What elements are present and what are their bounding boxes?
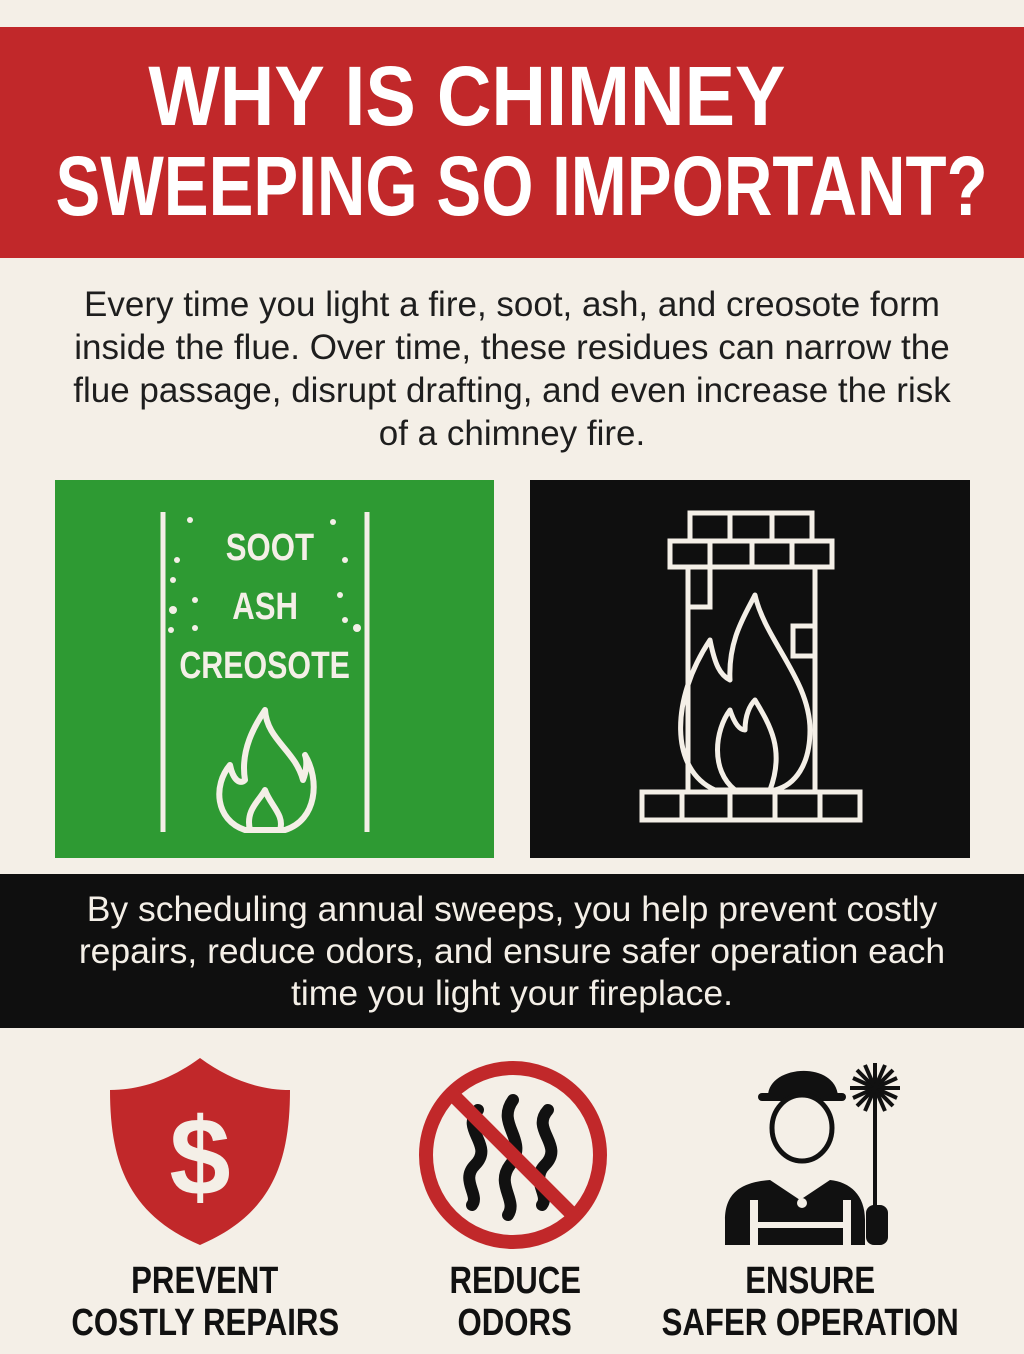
icon: no odors [419, 1061, 607, 1249]
intro text: Every time you light a fire, soot, ash, and creosote form [84, 285, 940, 324]
labels: soot ash creosote [180, 527, 350, 687]
label [661, 1260, 959, 1344]
icon: small flame [219, 710, 314, 830]
panel: chimney fire (black) [530, 480, 970, 858]
title [56, 49, 988, 233]
icon: shield with dollar: $ [169, 1096, 231, 1219]
title banner [0, 27, 1024, 258]
label: PREVENT [131, 1260, 279, 1302]
label: SAFER OPERATION [661, 1302, 959, 1344]
intro text: flue passage, disrupt drafting, and even increase the risk [73, 371, 951, 410]
icon: shield with dollar [110, 1058, 290, 1245]
benefit: reduce odors [419, 1061, 607, 1344]
black band text: By scheduling annual sweeps, you help prevent costly [87, 889, 937, 929]
title: WHY IS CHIMNEY [148, 49, 786, 143]
black band text: repairs, reduce odors, and ensure safer operation each [79, 931, 945, 971]
intro text: of a chimney fire. [379, 414, 645, 453]
labels: soot ash creosote: SOOT [226, 527, 314, 569]
labels: soot ash creosote: CREOSOTE [180, 645, 350, 687]
label: COSTLY REPAIRS [71, 1302, 339, 1344]
intro text: inside the flue. Over time, these residues can narrow the [74, 328, 950, 367]
label: ENSURE [745, 1260, 875, 1302]
label: ODORS [458, 1302, 572, 1344]
panel: flue residues (green) [55, 480, 494, 858]
label: REDUCE [449, 1260, 581, 1302]
icon: chimney sweep worker [724, 1063, 900, 1245]
label [449, 1260, 581, 1344]
benefit: ensure safer operation [661, 1063, 959, 1344]
black band text [0, 874, 1024, 1028]
labels: soot ash creosote: ASH [232, 586, 298, 628]
label [71, 1260, 339, 1344]
title: SWEEPING SO IMPORTANT? [56, 139, 988, 233]
benefit: prevent costly repairs [71, 1058, 339, 1344]
black band text: time you light your fireplace. [291, 973, 733, 1013]
intro text [73, 285, 951, 453]
